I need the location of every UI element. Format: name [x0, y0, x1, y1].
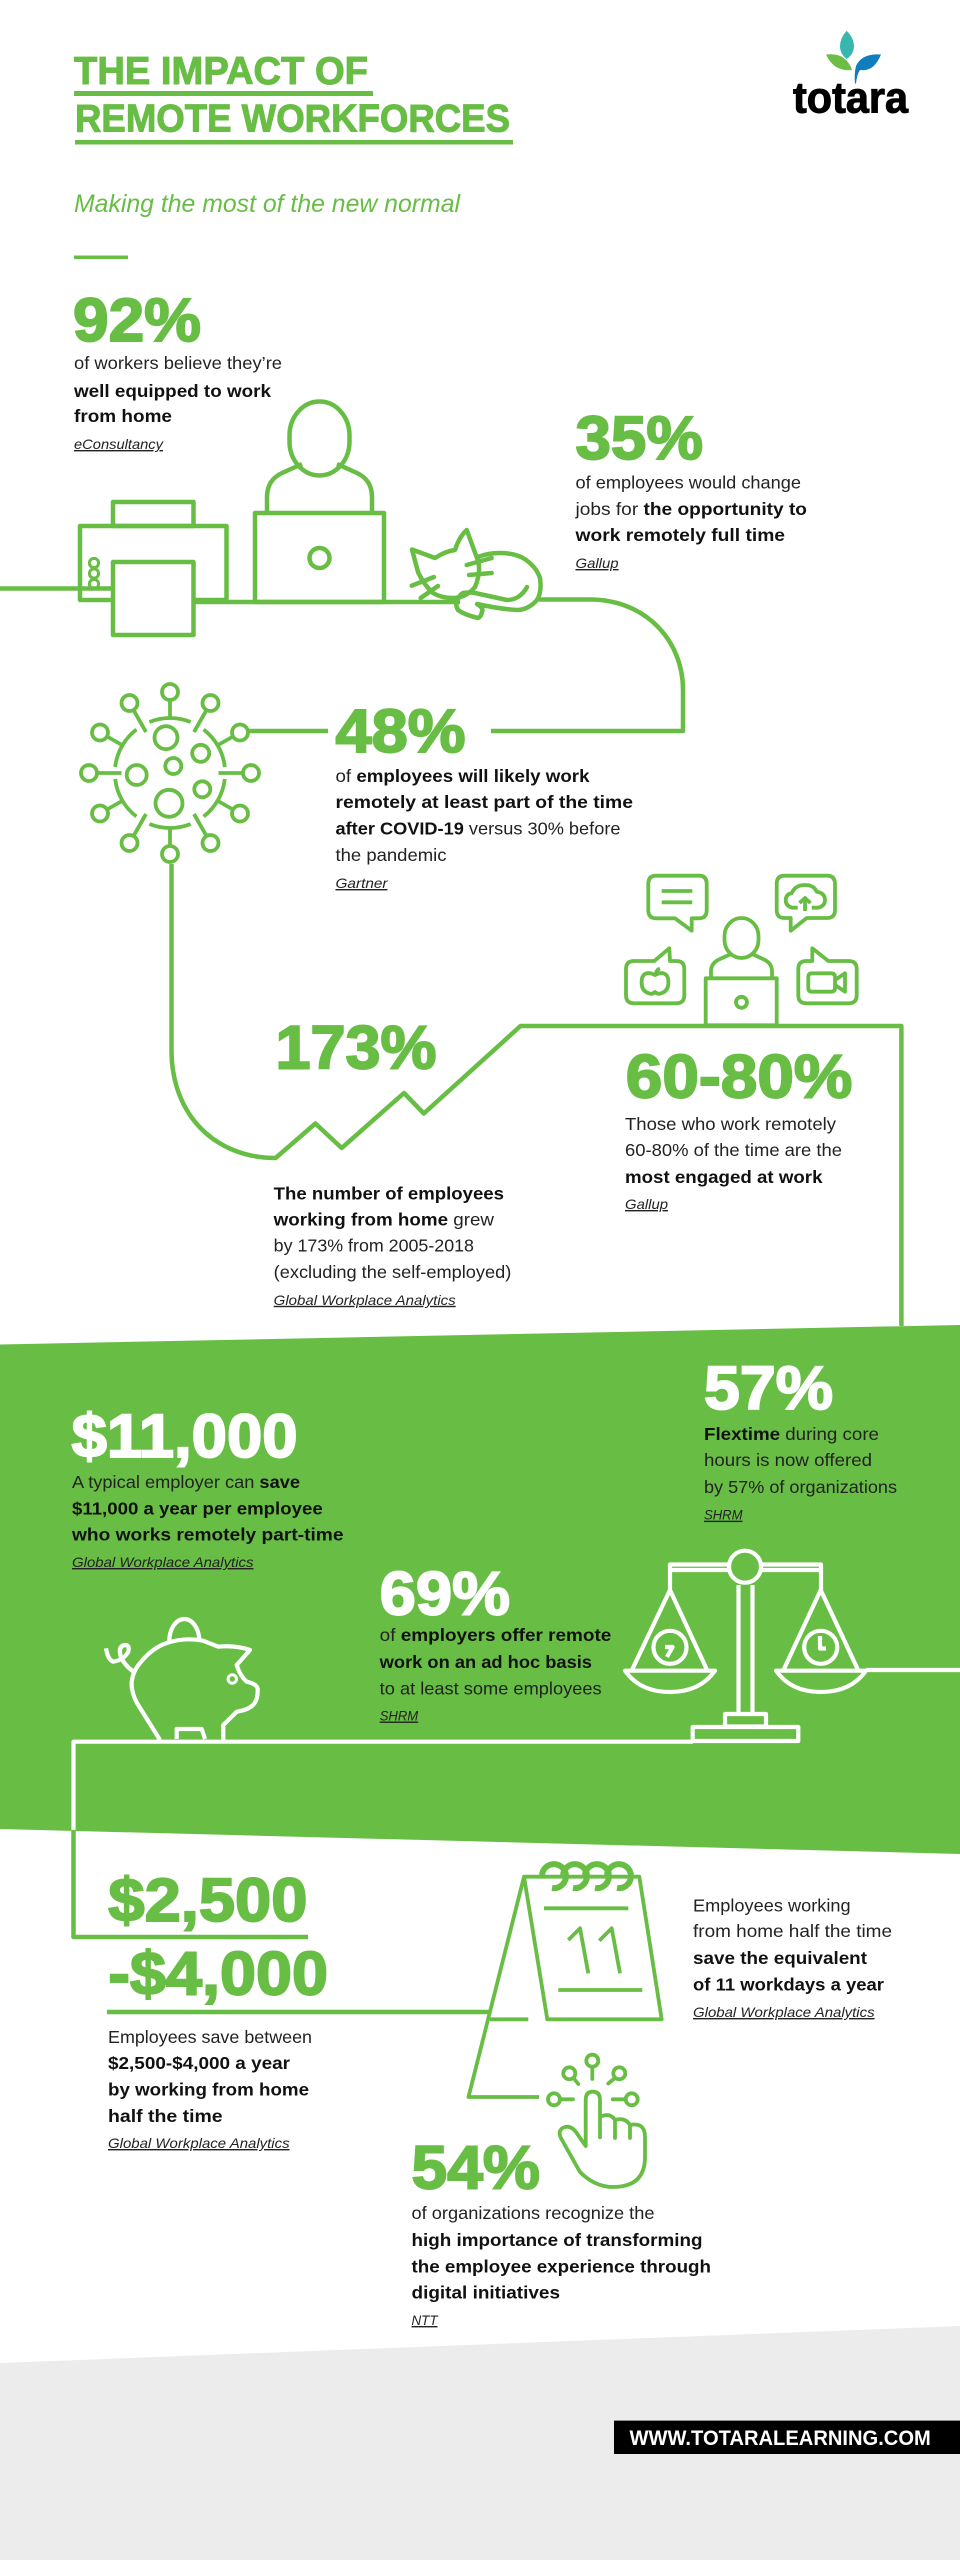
stat: 60-80%: [625, 1042, 852, 1212]
stat: 173%: 173%: [276, 1013, 436, 1081]
connector line: green path below band: [74, 1830, 490, 2012]
logo: totara: totara: [793, 74, 908, 122]
stat: 173%: (excluding the self-employed): [274, 1262, 511, 1282]
stat: 69%: work on an ad hoc basis: [379, 1652, 592, 1672]
stat: $2,500-$4,000: -$4,000: [108, 1940, 328, 2008]
connector line: growth chart zigzag: [172, 864, 901, 1326]
stat: $11,000: A typical employer can save: [72, 1472, 300, 1492]
stat: 60-80%: 60-80%: [626, 1042, 852, 1110]
connector line: top path: [0, 588, 683, 731]
stat: $2,500-$4,000: Employees save between: [108, 2027, 312, 2047]
icon: sleeping cat: [412, 530, 541, 618]
stat: $11,000: Global Workplace Analytics: [72, 1554, 254, 1570]
website badge: [614, 2421, 960, 2454]
short divider: [74, 256, 128, 259]
stat: 92%: 92%: [73, 286, 201, 354]
stat: 60-80%: most engaged at work: [625, 1167, 823, 1187]
stat: 35%: of employees would change: [576, 473, 801, 493]
stat: 92%: [73, 286, 282, 452]
stat: 35%: jobs for the opportunity to: [574, 499, 807, 519]
icon: desk calendar: [468, 1864, 662, 2097]
icon: printer: [80, 502, 226, 635]
stat: 11 workdays: from home half the time: [693, 1921, 892, 1941]
connector line: white path on band: [74, 1670, 960, 1830]
icon: virus: [81, 684, 259, 862]
stat: $2,500-$4,000: [108, 1866, 328, 2151]
stat: 54%: 54%: [412, 2134, 540, 2202]
stat: $2,500-$4,000: by working from home: [108, 2080, 309, 2100]
stat: $11,000: [71, 1402, 344, 1570]
stat: 35%: 35%: [576, 404, 703, 472]
stat: 54%: digital initiatives: [412, 2283, 560, 2303]
stat: $2,500-$4,000: half the time: [108, 2106, 223, 2126]
stat: 54%: high importance of transforming: [412, 2230, 702, 2250]
stat: 69%: to at least some employees: [380, 1678, 602, 1698]
stat: 60-80%: 60-80% of the time are the: [625, 1140, 842, 1160]
stat: 48%: after COVID-19 versus 30% before: [336, 819, 620, 839]
stat: 11 workdays: of 11 workdays a year: [693, 1974, 884, 1994]
stat: 35%: Gallup: [576, 555, 619, 571]
stat: 173%: The number of employees: [274, 1183, 504, 1203]
stat: 92%: well equipped to work: [73, 381, 271, 401]
stat: 11 workdays: [693, 1896, 892, 2020]
stat: 92%: eConsultancy: [74, 436, 164, 452]
stat: 173%: Global Workplace Analytics: [274, 1292, 456, 1308]
stat: 69%: [379, 1560, 612, 1724]
connector line: virus to 48%: [248, 729, 328, 733]
stat: 48%: Gartner: [336, 875, 389, 891]
background: green band panel: [0, 1325, 960, 1854]
stat: 69%: 69%: [380, 1560, 510, 1628]
stat: 57%: 57%: [704, 1354, 833, 1422]
title: REMOTE WORKFORCES: [75, 98, 510, 140]
stat: 48%: of employees will likely work: [336, 766, 590, 786]
stat: 54%: [412, 2134, 711, 2328]
stat: 57%: Flextime during core: [704, 1424, 879, 1444]
stat: 92%: of workers believe they’re: [74, 353, 282, 373]
icon: balance scales: [625, 1551, 866, 1741]
stat: $11,000: who works remotely part-time: [71, 1525, 344, 1545]
stat: 48%: remotely at least part of the time: [336, 792, 633, 812]
stat: $11,000: $11,000: [72, 1402, 298, 1470]
stat: 57%: [704, 1354, 897, 1523]
stat: 60-80%: Gallup: [625, 1196, 668, 1212]
subtitle: Making the most of the new normal: [74, 190, 461, 218]
stat: 11 workdays: save the equivalent: [693, 1948, 867, 1968]
stat: 35%: [574, 404, 807, 571]
icon: remote worker with chat bubbles: [626, 876, 857, 1025]
stat: 57%: by 57% of organizations: [704, 1477, 897, 1497]
stat: $11,000: $11,000 a year per employee: [72, 1498, 323, 1518]
stat: 69%: of employers offer remote: [380, 1625, 612, 1645]
stat: 57%: SHRM: [704, 1507, 743, 1523]
background: grey footer panel: [0, 2326, 960, 2560]
website badge: WWW.TOTARALEARNING.COM: [630, 2427, 931, 2450]
stat: 11 workdays: Global Workplace Analytics: [693, 2004, 875, 2020]
stat: 173%: working from home grew: [273, 1209, 494, 1229]
stat: 54%: of organizations recognize the: [412, 2203, 654, 2223]
title: THE IMPACT OF: [74, 50, 368, 93]
icon: person at laptop: [255, 402, 384, 602]
icon: piggy bank: [106, 1619, 258, 1740]
stat: 173%: by 173% from 2005-2018: [274, 1235, 474, 1255]
stat: 69%: SHRM: [380, 1708, 419, 1724]
stat: 54%: the employee experience through: [412, 2256, 711, 2276]
stat: 173%: [273, 1013, 511, 1308]
logo: totara: [793, 31, 908, 123]
stat: 54%: NTT: [412, 2312, 439, 2328]
stat: $2,500-$4,000: $2,500-$4,000 a year: [108, 2053, 290, 2073]
stat: 48%: the pandemic: [336, 845, 447, 865]
stat: 48%: 48%: [336, 697, 466, 765]
stat: 60-80%: Those who work remotely: [625, 1114, 836, 1134]
stat: 48%: [336, 697, 633, 891]
title: [74, 50, 513, 144]
stat: 35%: work remotely full time: [574, 525, 785, 545]
stat: 11 workdays: Employees working: [693, 1896, 851, 1916]
stat: 57%: hours is now offered: [704, 1450, 872, 1470]
stat: 92%: from home: [74, 406, 172, 426]
icon: hand touching digital nodes: [548, 2055, 645, 2187]
stat: $2,500-$4,000: $2,500: [108, 1866, 307, 1934]
stat: $2,500-$4,000: Global Workplace Analytics: [108, 2135, 290, 2151]
